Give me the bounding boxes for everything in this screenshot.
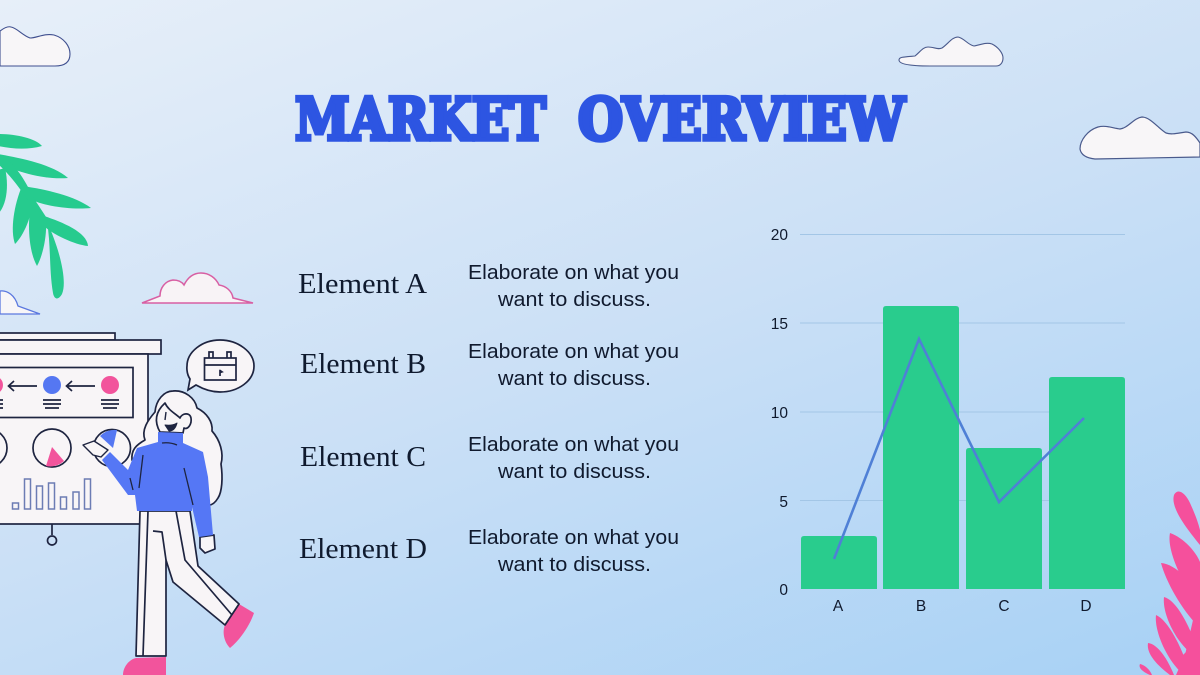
element D row: Element D [299,533,427,565]
eye [165,412,166,420]
speech bubble with calendar [187,340,254,392]
element C row: want to discuss. [497,461,651,483]
element B row: Element B [300,348,426,380]
x axis labels [833,598,1092,615]
y axis labels: 0 [779,582,788,599]
cloud: top left [0,27,70,66]
element B row: want to discuss. [497,368,651,390]
mini bar chart [12,479,90,509]
pink palm leaf [1140,491,1200,675]
y axis labels: 5 [779,494,788,511]
sweater [102,432,213,537]
x axis labels: A [833,598,844,615]
element C row: Element C [300,441,426,473]
cloud: blue left [0,291,40,314]
trouser seams [143,511,232,656]
board pull cord [51,524,53,535]
flow diagram [0,376,119,408]
element D row [299,527,679,576]
element D row: Elaborate on what you [468,527,679,549]
line series [834,339,1084,559]
hair [132,391,222,505]
element B row: Elaborate on what you [468,341,679,363]
cloud: pink outlined [142,273,253,303]
element B row [300,341,679,390]
green palm leaf [0,134,91,298]
cloud: top right [1080,117,1200,159]
y axis labels: 20 [771,227,788,244]
x axis labels: B [916,598,926,615]
element A row [298,262,679,311]
sweater folds [130,443,193,505]
cloud: top centre [899,37,1003,66]
x axis labels: C [998,598,1010,615]
element D row: want to discuss. [497,554,651,576]
element A row: Elaborate on what you [468,262,679,284]
title: OVERVIEW [578,86,906,154]
right hand [83,441,108,457]
y axis labels [771,227,788,599]
y axis labels: 15 [771,316,788,333]
element C row: Elaborate on what you [468,434,679,456]
element C row [300,434,679,483]
left hand [200,535,215,553]
title [295,86,906,154]
shoes [123,604,254,675]
combo chart [771,227,1125,615]
face and ear [156,403,191,433]
trousers [136,511,239,656]
presentation board [0,333,161,545]
y axis labels: 10 [771,405,788,422]
x axis labels: D [1080,598,1092,615]
bars [801,306,1125,589]
gauge charts [0,429,130,467]
title: MARKET [295,86,546,154]
mouth [165,423,177,431]
element A row: Element A [298,268,427,300]
element list [298,262,679,576]
presenter woman [83,391,254,675]
element A row: want to discuss. [497,289,651,311]
